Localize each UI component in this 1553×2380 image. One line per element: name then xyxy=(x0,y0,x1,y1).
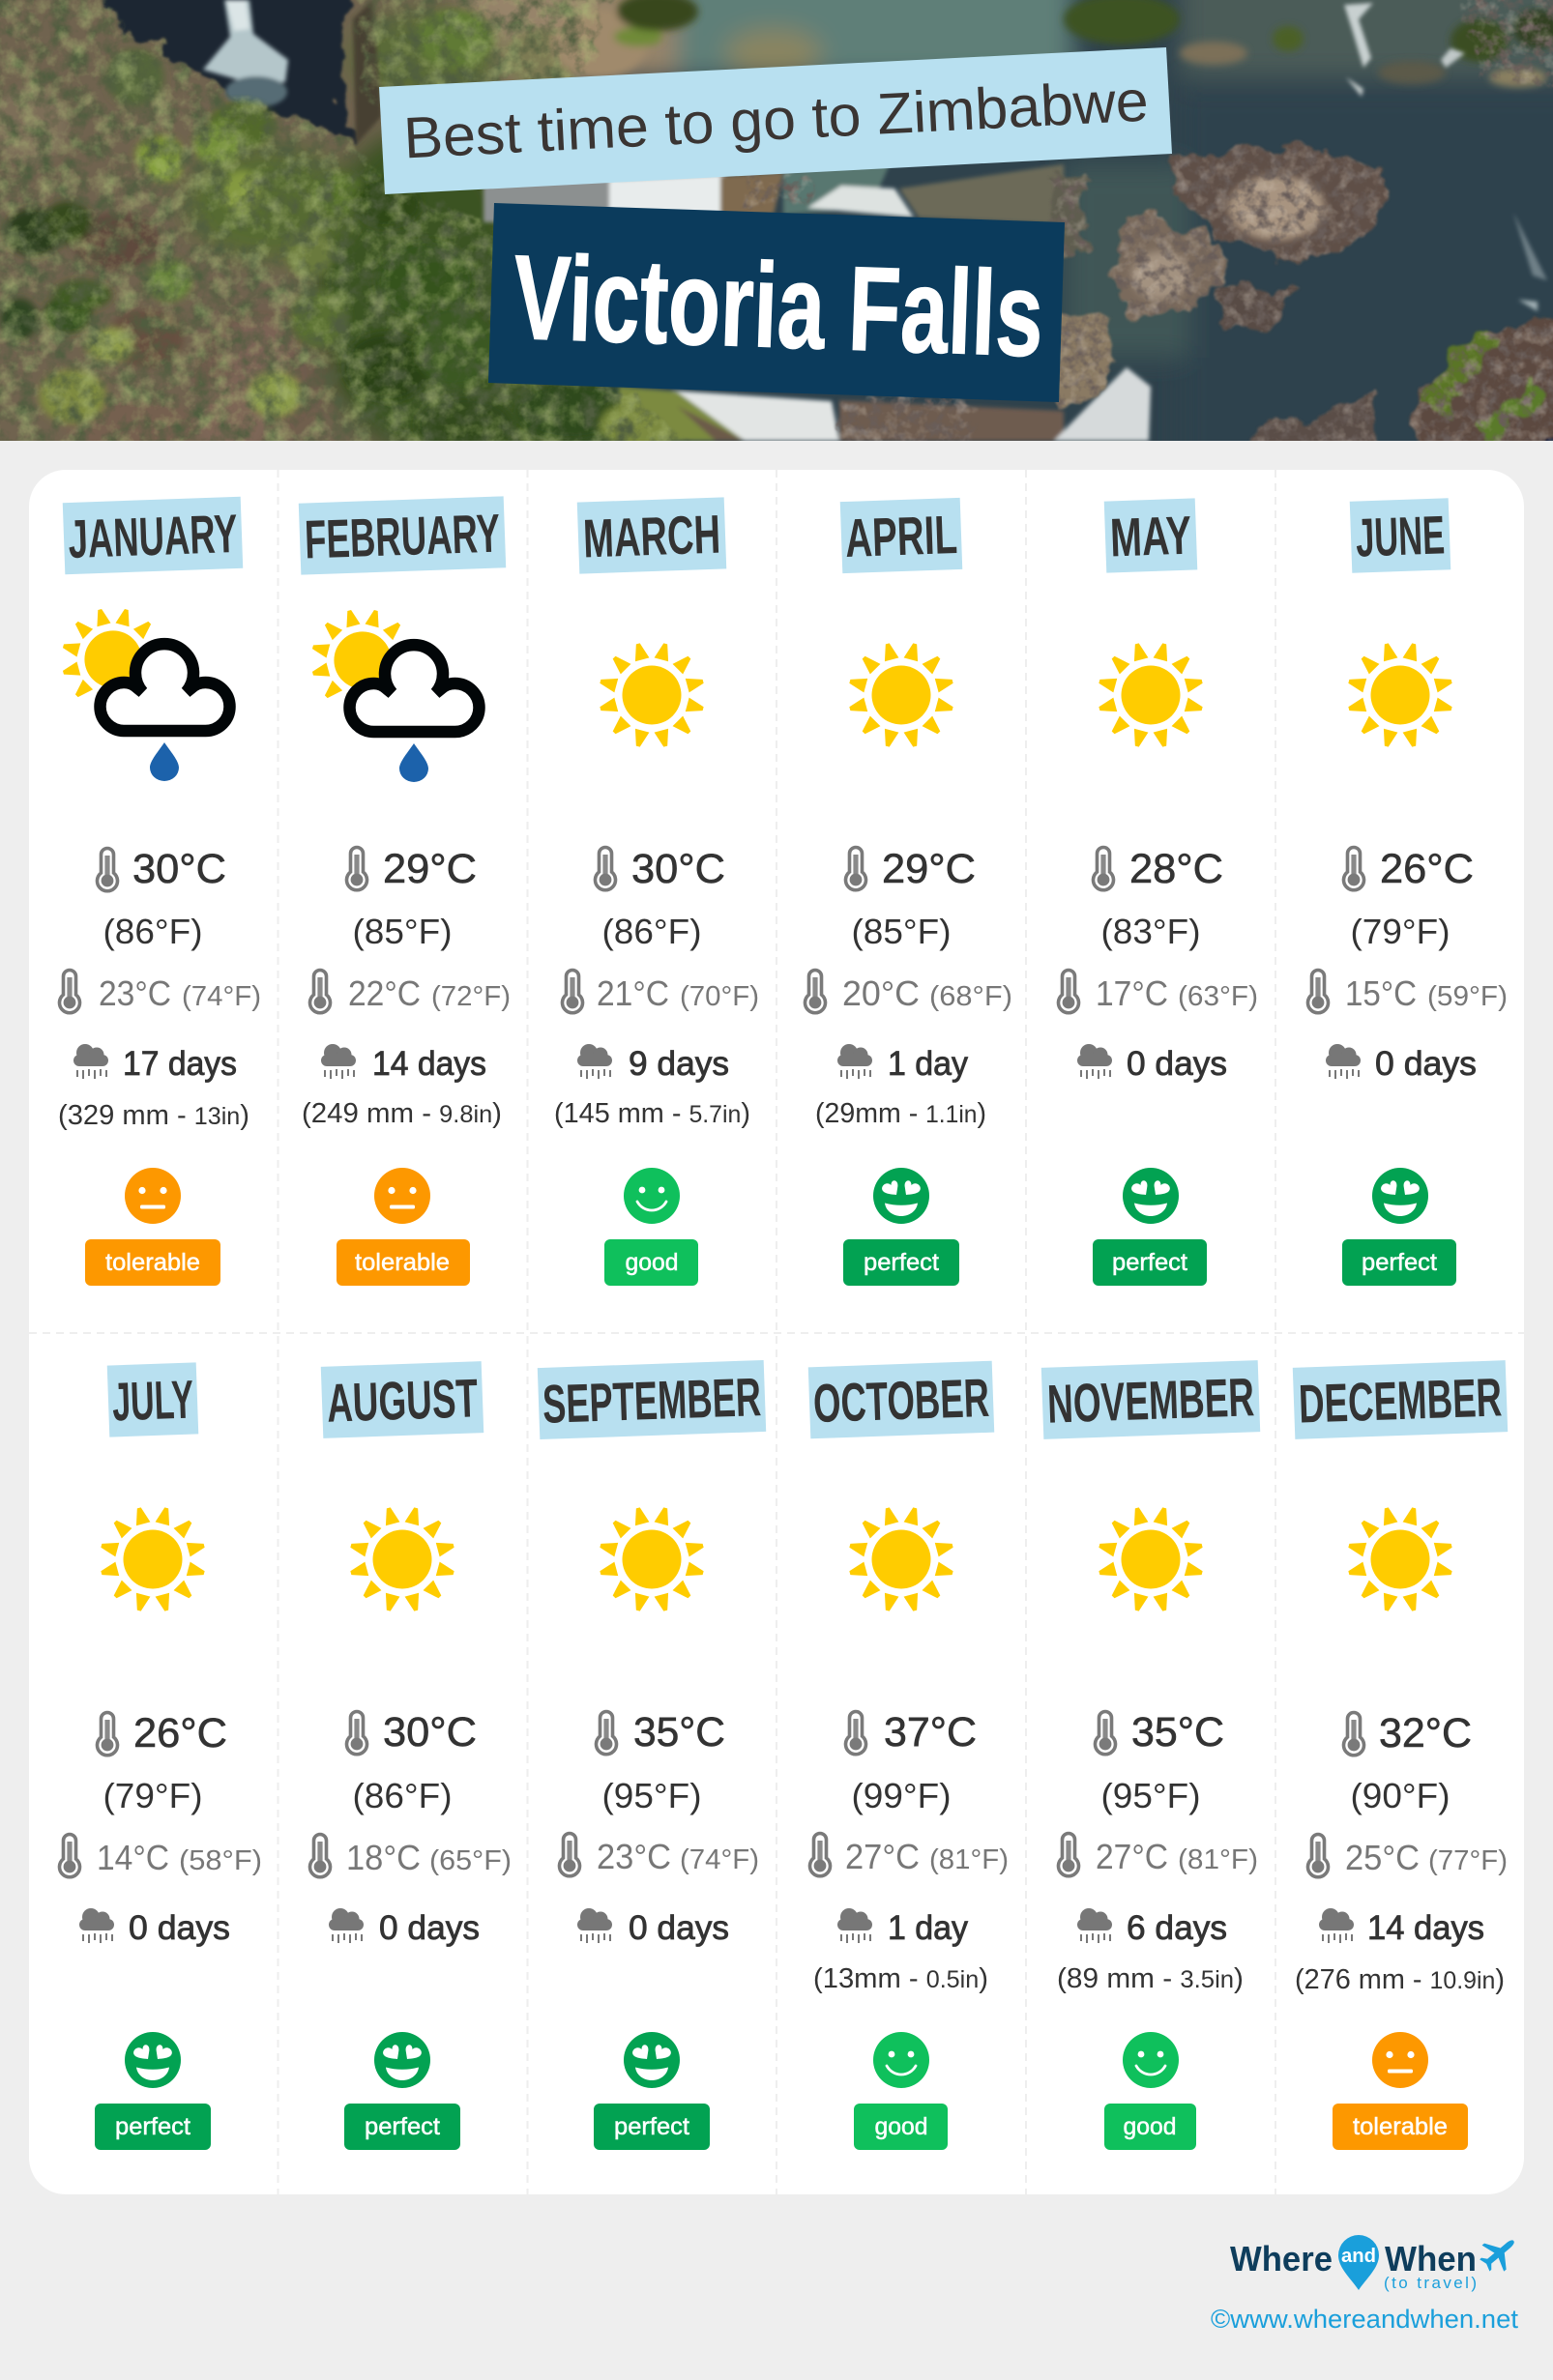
icon: heart-eyes face xyxy=(374,2032,430,2088)
month label: JULY xyxy=(111,1369,194,1432)
month label: NOVEMBER xyxy=(1046,1366,1255,1435)
rating badge: tolerable xyxy=(355,1249,450,1276)
icon: heart-eyes face xyxy=(1123,1168,1179,1224)
max temperature: 30°C xyxy=(383,1709,477,1756)
max temperature: 30°C xyxy=(132,846,226,892)
rating badge xyxy=(854,2104,948,2150)
month label xyxy=(577,497,726,574)
icon: sun xyxy=(599,1506,705,1612)
logo tagline: (to travel) xyxy=(1384,2274,1477,2292)
rainy days: 6 days xyxy=(1127,1909,1227,1947)
panel: November xyxy=(1041,1360,1260,2150)
panel: June xyxy=(1307,498,1508,1286)
month label: AUGUST xyxy=(326,1367,479,1434)
precipitation: (29mm - 1.1in) xyxy=(815,1098,986,1129)
min temperature xyxy=(810,1833,1009,1876)
panel: December xyxy=(1293,1360,1508,2150)
min temperature xyxy=(309,971,511,1013)
rock islands xyxy=(1050,139,1553,441)
panel: August xyxy=(309,1361,512,2150)
rating badge: perfect xyxy=(365,2113,440,2140)
max temperature Fahrenheit: (85°F) xyxy=(352,912,453,951)
rating badge xyxy=(95,2104,211,2150)
min temperature xyxy=(1307,971,1508,1013)
rating badge: perfect xyxy=(864,1249,939,1276)
max temperature: 35°C xyxy=(633,1709,725,1756)
month label: SEPTEMBER xyxy=(542,1366,762,1435)
panel: May xyxy=(1058,498,1258,1286)
icon: sun behind rain cloud xyxy=(311,609,480,782)
panel: October xyxy=(808,1361,1009,2150)
min temperature: 27°C xyxy=(845,1837,920,1876)
subtitle banner: Best time to go to Zimbabwe xyxy=(402,69,1150,170)
min temperature: (81°F) xyxy=(1178,1844,1258,1875)
max temperature Fahrenheit: (90°F) xyxy=(1350,1776,1450,1815)
max temperature Fahrenheit: (86°F) xyxy=(103,912,203,951)
rainy days xyxy=(1319,1908,1484,1947)
max temperature Fahrenheit: (79°F) xyxy=(103,1776,203,1815)
icon: sun xyxy=(1098,642,1204,748)
subtitle banner xyxy=(379,47,1172,194)
min temperature: (70°F) xyxy=(680,981,759,1012)
max temperature Fahrenheit: (86°F) xyxy=(352,1776,453,1815)
min temperature: 14°C xyxy=(97,1838,169,1877)
month label xyxy=(808,1361,994,1438)
rating badge xyxy=(85,1239,220,1286)
min temperature: 22°C xyxy=(348,973,421,1013)
icon: smiling face xyxy=(873,2032,929,2088)
max temperature: 29°C xyxy=(383,846,477,892)
title banner: Victoria Falls xyxy=(512,231,1045,382)
month label: APRIL xyxy=(844,504,958,568)
footer logo and credit xyxy=(1211,2228,1525,2334)
rating badge xyxy=(594,2104,710,2150)
min temperature xyxy=(1058,971,1258,1013)
max temperature Fahrenheit: (99°F) xyxy=(851,1776,952,1815)
panel: March xyxy=(554,497,759,1286)
min temperature: 18°C xyxy=(346,1838,421,1877)
icon: airplane xyxy=(1474,2228,1525,2278)
rating badge: good xyxy=(625,1249,679,1276)
rainy days xyxy=(321,1044,486,1083)
icon: neutral face xyxy=(1372,2032,1428,2088)
month label xyxy=(63,497,243,574)
background photo: aerial view of Victoria Falls xyxy=(0,0,1553,483)
min temperature: (77°F) xyxy=(1428,1845,1508,1876)
min temperature: (63°F) xyxy=(1178,981,1258,1012)
icon: sun xyxy=(848,1506,954,1612)
photo texture xyxy=(0,0,689,441)
icon: sun xyxy=(100,1506,206,1612)
icon: neutral face xyxy=(374,1168,430,1224)
rainy days xyxy=(1326,1044,1477,1083)
min temperature: (81°F) xyxy=(929,1844,1009,1875)
falls and rapids xyxy=(483,3,1547,441)
min temperature xyxy=(563,971,759,1013)
min temperature: (72°F) xyxy=(431,981,511,1012)
icon: map pin with and: and xyxy=(1341,2246,1376,2267)
precipitation: (329 mm - 13in) xyxy=(58,1100,249,1131)
max temperature: 26°C xyxy=(1380,846,1474,892)
min temperature: 21°C xyxy=(597,973,669,1013)
rainy days: 1 day xyxy=(888,1909,968,1947)
max temperature: 37°C xyxy=(884,1709,977,1756)
rainy days: 0 days xyxy=(379,1909,480,1947)
icon: sun xyxy=(1347,1506,1453,1612)
rating badge xyxy=(604,1239,698,1286)
min temperature xyxy=(60,1835,262,1877)
rating badge xyxy=(1093,1239,1207,1286)
icon: sun xyxy=(599,642,705,748)
min temperature xyxy=(1058,1833,1258,1876)
precipitation: (276 mm - 10.9in) xyxy=(1295,1964,1505,1995)
rainy days xyxy=(79,1908,230,1947)
min temperature xyxy=(559,1833,759,1876)
month label xyxy=(1350,498,1450,573)
icon: smiling face xyxy=(1123,2032,1179,2088)
min temperature: 20°C xyxy=(842,973,920,1013)
precipitation: (13mm - 0.5in) xyxy=(813,1963,988,1994)
max temperature: 26°C xyxy=(133,1710,227,1756)
panel: April xyxy=(805,498,1012,1286)
min temperature: (74°F) xyxy=(182,981,261,1012)
max temperature Fahrenheit: (95°F) xyxy=(1100,1776,1201,1815)
month label xyxy=(321,1361,483,1438)
rainy days xyxy=(1077,1908,1227,1947)
min temperature xyxy=(1307,1835,1508,1877)
min temperature xyxy=(60,971,261,1013)
rating badge: perfect xyxy=(1112,1249,1187,1276)
max temperature: 28°C xyxy=(1129,846,1223,892)
month label: MARCH xyxy=(582,504,721,568)
rainy days: 1 day xyxy=(888,1045,968,1083)
rainy days: 14 days xyxy=(372,1045,486,1083)
month label: OCTOBER xyxy=(812,1367,990,1434)
month label: JANUARY xyxy=(67,503,239,569)
rating badge xyxy=(1333,2104,1468,2150)
icon: sun xyxy=(349,1506,455,1612)
precipitation: (249 mm - 9.8in) xyxy=(302,1098,502,1129)
max temperature Fahrenheit: (95°F) xyxy=(601,1776,702,1815)
rainy days: 17 days xyxy=(123,1045,237,1083)
rainy days xyxy=(329,1908,480,1947)
rating badge xyxy=(843,1239,959,1286)
month label xyxy=(107,1362,198,1437)
min temperature xyxy=(309,1835,512,1877)
rainy days xyxy=(577,1908,729,1947)
month label xyxy=(538,1360,766,1439)
month label: JUNE xyxy=(1355,504,1446,568)
website credit: ©www.whereandwhen.net xyxy=(1211,2305,1518,2334)
max temperature Fahrenheit: (79°F) xyxy=(1350,912,1450,951)
icon: sun xyxy=(1347,642,1453,748)
min temperature: (58°F) xyxy=(179,1845,262,1876)
rating badge: good xyxy=(1124,2113,1176,2140)
month label: MAY xyxy=(1109,505,1192,567)
min temperature: 15°C xyxy=(1345,973,1417,1013)
month label: FEBRUARY xyxy=(304,502,501,570)
rainy days: 0 days xyxy=(629,1909,729,1947)
rating badge xyxy=(344,2104,460,2150)
icon: heart-eyes face xyxy=(1372,1168,1428,1224)
icon: heart-eyes face xyxy=(125,2032,181,2088)
month label xyxy=(840,498,962,573)
logo wordmark: Where: Where xyxy=(1230,2239,1333,2278)
icon: map pin with and xyxy=(1338,2235,1379,2290)
icon: heart-eyes face xyxy=(873,1168,929,1224)
icon: sun xyxy=(1098,1506,1204,1612)
panel: monthly calendar card xyxy=(29,470,1524,2194)
icon: neutral face xyxy=(125,1168,181,1224)
min temperature: (68°F) xyxy=(929,981,1012,1012)
max temperature Fahrenheit: (83°F) xyxy=(1100,912,1201,951)
precipitation: (145 mm - 5.7in) xyxy=(554,1098,750,1129)
rating badge: tolerable xyxy=(105,1249,200,1276)
rainy days xyxy=(577,1044,729,1083)
max temperature: 32°C xyxy=(1379,1710,1472,1756)
rainy days xyxy=(837,1908,968,1947)
rainy days: 0 days xyxy=(1127,1045,1227,1083)
rating badge: tolerable xyxy=(1353,2113,1448,2140)
min temperature: 17°C xyxy=(1096,973,1168,1013)
min temperature xyxy=(805,971,1012,1013)
icon: sun xyxy=(848,642,954,748)
rainy days: 14 days xyxy=(1367,1909,1484,1947)
icon: heart-eyes face xyxy=(624,2032,680,2088)
header xyxy=(0,0,1553,483)
panel: July xyxy=(60,1362,262,2150)
max temperature: 29°C xyxy=(882,846,976,892)
max temperature Fahrenheit: (85°F) xyxy=(851,912,952,951)
rating badge: perfect xyxy=(115,2113,190,2140)
icon: sun behind rain cloud xyxy=(62,608,230,781)
rainy days xyxy=(1077,1044,1227,1083)
min temperature: (59°F) xyxy=(1427,981,1508,1012)
rating badge: perfect xyxy=(614,2113,689,2140)
min temperature: (74°F) xyxy=(680,1844,759,1875)
rating badge xyxy=(337,1239,470,1286)
precipitation: (89 mm - 3.5in) xyxy=(1057,1963,1244,1994)
icon: smiling face xyxy=(624,1168,680,1224)
min temperature: 25°C xyxy=(1345,1838,1420,1877)
panel: February xyxy=(299,496,511,1286)
max temperature: 35°C xyxy=(1131,1709,1224,1756)
rating badge: perfect xyxy=(1362,1249,1437,1276)
month label xyxy=(1104,498,1197,573)
tree canopies xyxy=(0,0,1553,454)
logo wordmark: When: When xyxy=(1385,2239,1477,2278)
rainy days: 0 days xyxy=(1375,1045,1477,1083)
rainy days: 9 days xyxy=(629,1045,729,1083)
title banner xyxy=(488,203,1065,402)
rainy days xyxy=(73,1044,237,1083)
gorge xyxy=(97,0,356,145)
min temperature: 27°C xyxy=(1096,1837,1168,1876)
panel: January xyxy=(58,497,261,1286)
month label xyxy=(1041,1360,1260,1439)
rainy days: 0 days xyxy=(129,1909,230,1947)
panel: September xyxy=(538,1360,766,2150)
min temperature: 23°C xyxy=(597,1837,671,1876)
min temperature: 23°C xyxy=(99,973,171,1013)
rating badge xyxy=(1104,2104,1196,2150)
min temperature: (65°F) xyxy=(429,1845,512,1876)
month label xyxy=(299,496,506,575)
rating badge xyxy=(1342,1239,1456,1286)
rainy days xyxy=(837,1044,968,1083)
rating badge: good xyxy=(874,2113,928,2140)
max temperature Fahrenheit: (86°F) xyxy=(601,912,702,951)
max temperature: 30°C xyxy=(631,846,725,892)
